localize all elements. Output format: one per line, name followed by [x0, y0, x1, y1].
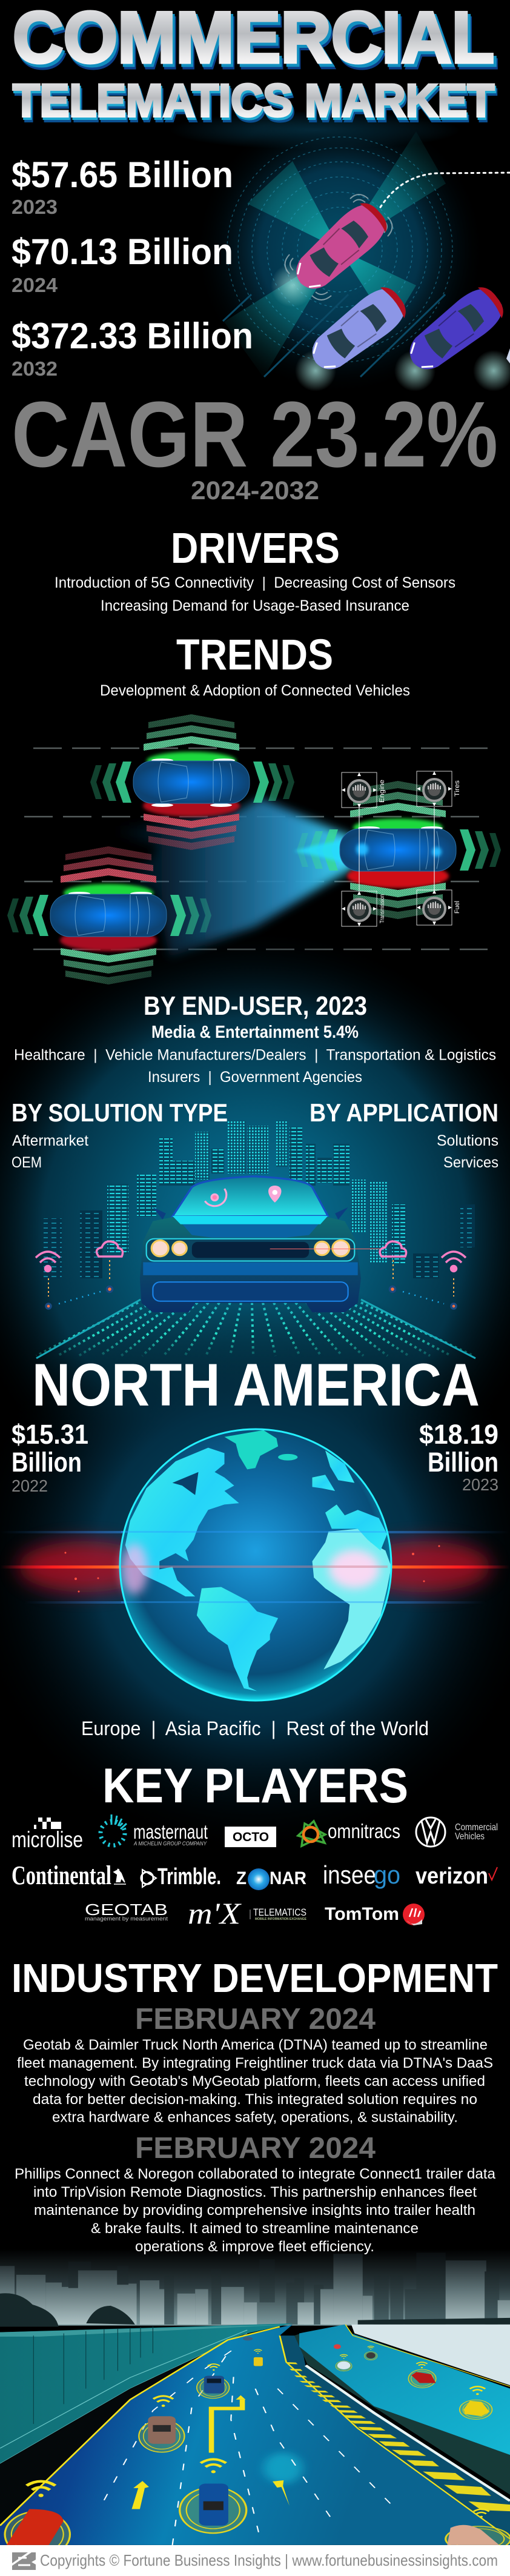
north america value 2022: 2022	[12, 1476, 48, 1495]
logo: inseego: insee	[323, 1861, 376, 1889]
logo: omnitracs	[298, 1820, 400, 1846]
by end-user: Media & Entertainment 5.4%	[151, 1023, 359, 1042]
greenland	[225, 1430, 278, 1469]
logo: continental: Continental	[12, 1861, 111, 1890]
logo: volkswagen commercial vehicles: Vehicles	[455, 1831, 485, 1842]
title: TELEMATICS MARKET	[15, 80, 497, 131]
hatched shoulder base	[280, 2335, 510, 2539]
lane markings	[104, 2349, 390, 2545]
market size figures: 2024	[12, 274, 58, 296]
shoulder	[0, 2333, 247, 2526]
diagnostics: engine	[342, 772, 386, 808]
right wifi and cloud nodes	[380, 1241, 466, 1309]
title	[13, 0, 498, 131]
development: february 2024 phillips connect	[15, 2132, 496, 2255]
north america value 2023: Billion	[428, 1447, 498, 1478]
car front view	[140, 1177, 380, 1312]
continent: north america	[125, 1448, 239, 1596]
other regions: Europe | Asia Pacific | Rest of the World	[81, 1718, 429, 1739]
logo: trimble	[141, 1864, 221, 1890]
by application: Solutions	[437, 1132, 498, 1149]
logo: mix telematics: TELEMATICS	[253, 1907, 306, 1918]
logo: mix telematics: MOBILE INFORMATION EXCHANGE	[255, 1917, 306, 1921]
CAGR: 2024-2032	[191, 476, 319, 505]
hero illustration: connected cars on radar	[170, 104, 510, 395]
development: february 2024 geotab: fleet management. By integrating Freightliner truck data via DTNA's DaaS	[17, 2055, 493, 2071]
logo: mix telematics: m'X	[188, 1896, 242, 1930]
city skyline	[44, 1121, 475, 1278]
logo: geotab: management by measurement	[85, 1916, 168, 1922]
logo: microlise: microlise	[12, 1827, 83, 1852]
diagnostics: tires	[417, 771, 461, 806]
development: february 2024 geotab: FEBRUARY 2024	[135, 2003, 376, 2036]
by solution type: OEM	[12, 1154, 42, 1171]
diagnostics: transmission	[342, 891, 386, 926]
title: COMMERCIAL	[16, 2, 498, 84]
logo: geotab: GEOTAB	[85, 1900, 168, 1919]
diagnostics: tires: Tires	[454, 780, 461, 797]
vehicle 3	[294, 781, 501, 919]
by end-user: BY END-USER, 2023	[144, 991, 367, 1021]
drivers: Introduction of 5G Connectivity | Decreasing Cost of Sensors	[55, 574, 455, 591]
footer	[0, 2545, 510, 2576]
development: february 2024 phillips connect: & brake faults. It aimed to streamline maintenance	[91, 2220, 419, 2237]
highway with connected cars	[0, 2249, 510, 2557]
market size figures: $57.65 Billion	[12, 154, 233, 195]
by application: Services	[443, 1154, 498, 1171]
drivers: DRIVERS	[171, 525, 340, 573]
south america	[197, 1587, 278, 1691]
north america value 2023: $18.19	[419, 1419, 498, 1450]
trends: TRENDS	[176, 631, 333, 679]
title: COMMERCIAL	[15, 0, 497, 81]
left wall	[0, 2323, 293, 2464]
logo: zonar: NAR	[270, 1868, 306, 1888]
north america value 2022: $15.31	[12, 1419, 88, 1450]
logo: tomtom: TomTom	[325, 1904, 399, 1924]
logo: volkswagen commercial vehicles	[416, 1817, 498, 1847]
vehicle 1	[90, 714, 294, 850]
north america value 2022: Billion	[12, 1447, 82, 1478]
median	[294, 2333, 510, 2495]
logo: zonar	[236, 1868, 306, 1890]
north america value 2022	[12, 1419, 88, 1495]
trends	[100, 631, 410, 699]
market size figures: $70.13 Billion	[12, 231, 233, 272]
logo: geotab	[85, 1900, 168, 1922]
development: february 2024 phillips connect: into TripVision Remote Diagnostics. This partnership enhances fleet	[33, 2184, 477, 2200]
by solution type: Aftermarket	[12, 1132, 88, 1149]
logo: masternaut: masternaut	[133, 1821, 208, 1843]
by end-user	[14, 991, 496, 1086]
by solution type	[12, 1098, 228, 1171]
diagnostics: engine: Engine	[379, 780, 386, 803]
development: february 2024 phillips connect: FEBRUARY 2024	[135, 2132, 376, 2165]
logo: volkswagen commercial vehicles: Commercial	[455, 1822, 498, 1833]
right wall	[351, 2325, 510, 2385]
logo: inseego: go	[374, 1861, 400, 1889]
logo: omnitracs: omnitracs	[328, 1820, 400, 1842]
drivers	[55, 525, 455, 614]
title: TELEMATICS MARKET	[13, 75, 494, 127]
development: february 2024 phillips connect: maintenance by providing comprehensive insights into trailer health	[34, 2202, 475, 2219]
wifi signals	[27, 2346, 489, 2518]
connected vehicles illustration	[7, 714, 501, 984]
development: february 2024 geotab: extra hardware & enhances safety, operations, & sustainability.	[52, 2110, 458, 2125]
market size figures: 2032	[12, 357, 58, 380]
development: february 2024 geotab	[17, 2003, 493, 2125]
lane arrows and route	[131, 2480, 290, 2509]
development: february 2024 geotab: data for better decision-making. This integrated solution requires no	[33, 2091, 477, 2108]
logo: tomtom	[325, 1904, 425, 1925]
logo: mix telematics	[188, 1896, 306, 1930]
vehicle 2	[7, 846, 211, 984]
globe with flare	[0, 1429, 510, 1701]
title: TELEMATICS MARKET	[14, 78, 495, 129]
diagnostics: transmission: Transmission	[379, 894, 386, 923]
development: february 2024 phillips connect: operations & improve fleet efficiency.	[135, 2239, 374, 2255]
drivers: Increasing Demand for Usage-Based Insurance	[101, 597, 409, 614]
by solution type: BY SOLUTION TYPE	[12, 1098, 228, 1127]
market size figures: $372.33 Billion	[12, 316, 253, 356]
left wifi and cloud nodes	[36, 1241, 123, 1309]
development: february 2024 geotab: Geotab & Daimler Truck North America (DTNA) teamed up to streamline	[23, 2037, 488, 2053]
footer logo	[12, 2552, 36, 2570]
by application	[310, 1098, 498, 1171]
connected cars	[5, 2337, 510, 2557]
logo: masternaut: A MICHELIN GROUP COMPANY	[133, 1841, 207, 1847]
logo: zonar: Z	[236, 1868, 247, 1888]
development: february 2024 geotab: technology with Geotab's MyGeotab platform, fleets can access unified	[24, 2073, 485, 2090]
logo: trimble: Trimble.	[157, 1864, 221, 1890]
trees	[0, 2293, 510, 2327]
logo: microlise	[12, 1817, 83, 1852]
diagnostics: fuel: Fuel	[454, 901, 461, 914]
iceland	[278, 1454, 297, 1461]
main road	[0, 2325, 510, 2545]
development: february 2024 phillips connect: Phillips Connect & Noregon collaborated to integrate Connect1 trailer data	[15, 2166, 496, 2182]
trends: Development & Adoption of Connected Vehicles	[100, 682, 410, 699]
right road	[299, 2325, 510, 2455]
africa	[313, 1529, 391, 1670]
hatched edge	[280, 2335, 510, 2539]
market size figures	[12, 154, 253, 380]
skyline	[0, 2252, 510, 2325]
logo: octo	[225, 1827, 276, 1847]
sky haze	[0, 2249, 510, 2326]
europe	[325, 1504, 387, 1550]
data floor	[36, 1300, 475, 1358]
key player logos	[12, 1814, 498, 1930]
smart city background with car	[0, 927, 510, 1856]
logo: octo: OCTO	[233, 1830, 269, 1844]
logo: masternaut	[101, 1814, 208, 1847]
market size figures: 2023	[12, 196, 58, 218]
north america value 2023	[419, 1419, 498, 1494]
by end-user: Insurers | Government Agencies	[148, 1069, 362, 1086]
north america value 2023: 2023	[462, 1475, 498, 1494]
key players heading: KEY PLAYERS	[102, 1759, 408, 1813]
by end-user: Healthcare | Vehicle Manufacturers/Dealers | Transportation & Logistics	[14, 1047, 496, 1064]
diagnostics: fuel	[417, 890, 461, 925]
logo: verizon: verizon	[416, 1864, 488, 1889]
